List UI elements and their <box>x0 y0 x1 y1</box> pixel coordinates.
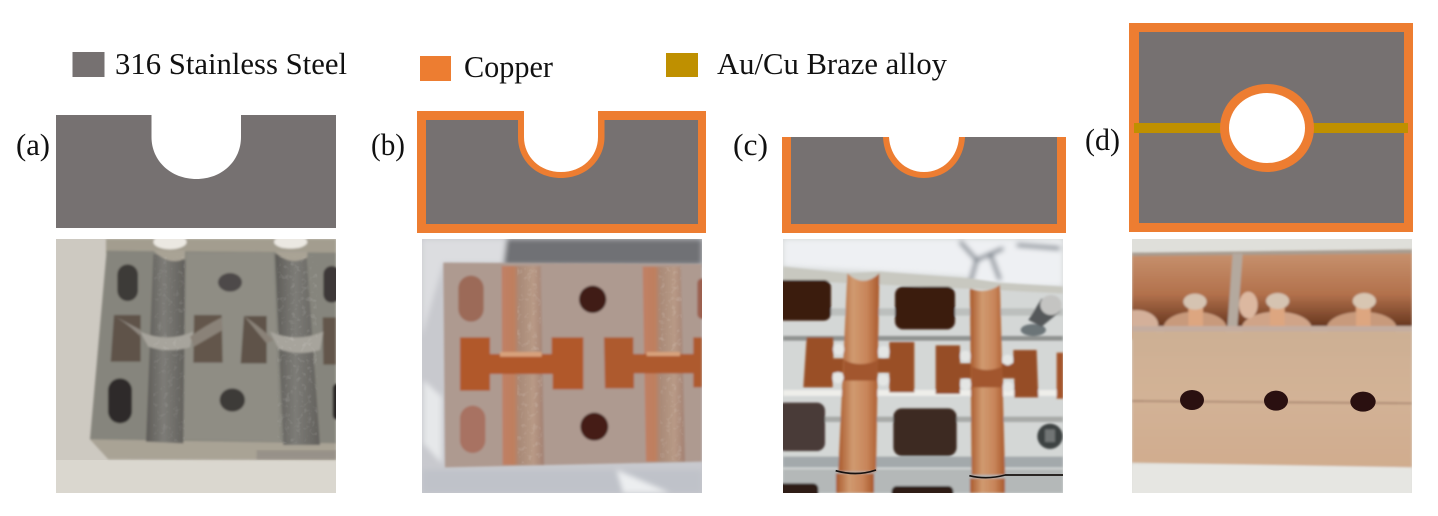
bridge band over tubes <box>843 360 878 381</box>
diagram (b): copper plated block <box>417 111 706 233</box>
label (d): (d) <box>1085 123 1120 157</box>
tubes <box>838 273 879 472</box>
label (a): (a) <box>16 128 50 162</box>
cross pieces <box>111 315 141 362</box>
pin 3 <box>1326 310 1398 328</box>
bands <box>783 267 1063 293</box>
diagram (c): machined block, copper on sides and groove <box>782 137 1066 233</box>
legend: 316 stainless steel: 316 Stainless Steel <box>115 47 347 81</box>
legend: Au/Cu braze alloy: Au/Cu Braze alloy <box>717 47 948 81</box>
openings <box>777 280 831 321</box>
label (c): (c) <box>733 128 768 162</box>
slots <box>117 264 138 301</box>
pin 2 <box>1241 310 1312 328</box>
diagram (a): bare steel block with open groove <box>56 115 336 228</box>
grooves <box>146 254 185 443</box>
cross pieces <box>803 337 914 392</box>
label (b): (b) <box>371 128 405 162</box>
ledge <box>1132 326 1412 332</box>
diagram (d): brazed assembly with channel <box>1129 23 1413 232</box>
plate <box>1132 332 1412 467</box>
legend: copper <box>420 50 553 84</box>
pin 1 <box>1162 311 1227 328</box>
hole <box>1037 424 1063 449</box>
relief circles <box>833 344 844 355</box>
photo (c): brazed-ready part on foil <box>777 239 1063 503</box>
divider <box>1227 253 1243 327</box>
photo (a): machined steel part <box>56 235 343 493</box>
pin <box>1021 324 1046 336</box>
photo (d): brazed assembly <box>1115 239 1412 494</box>
legend: copper: Copper <box>464 50 553 84</box>
photo (b): copper plated part <box>422 239 707 493</box>
